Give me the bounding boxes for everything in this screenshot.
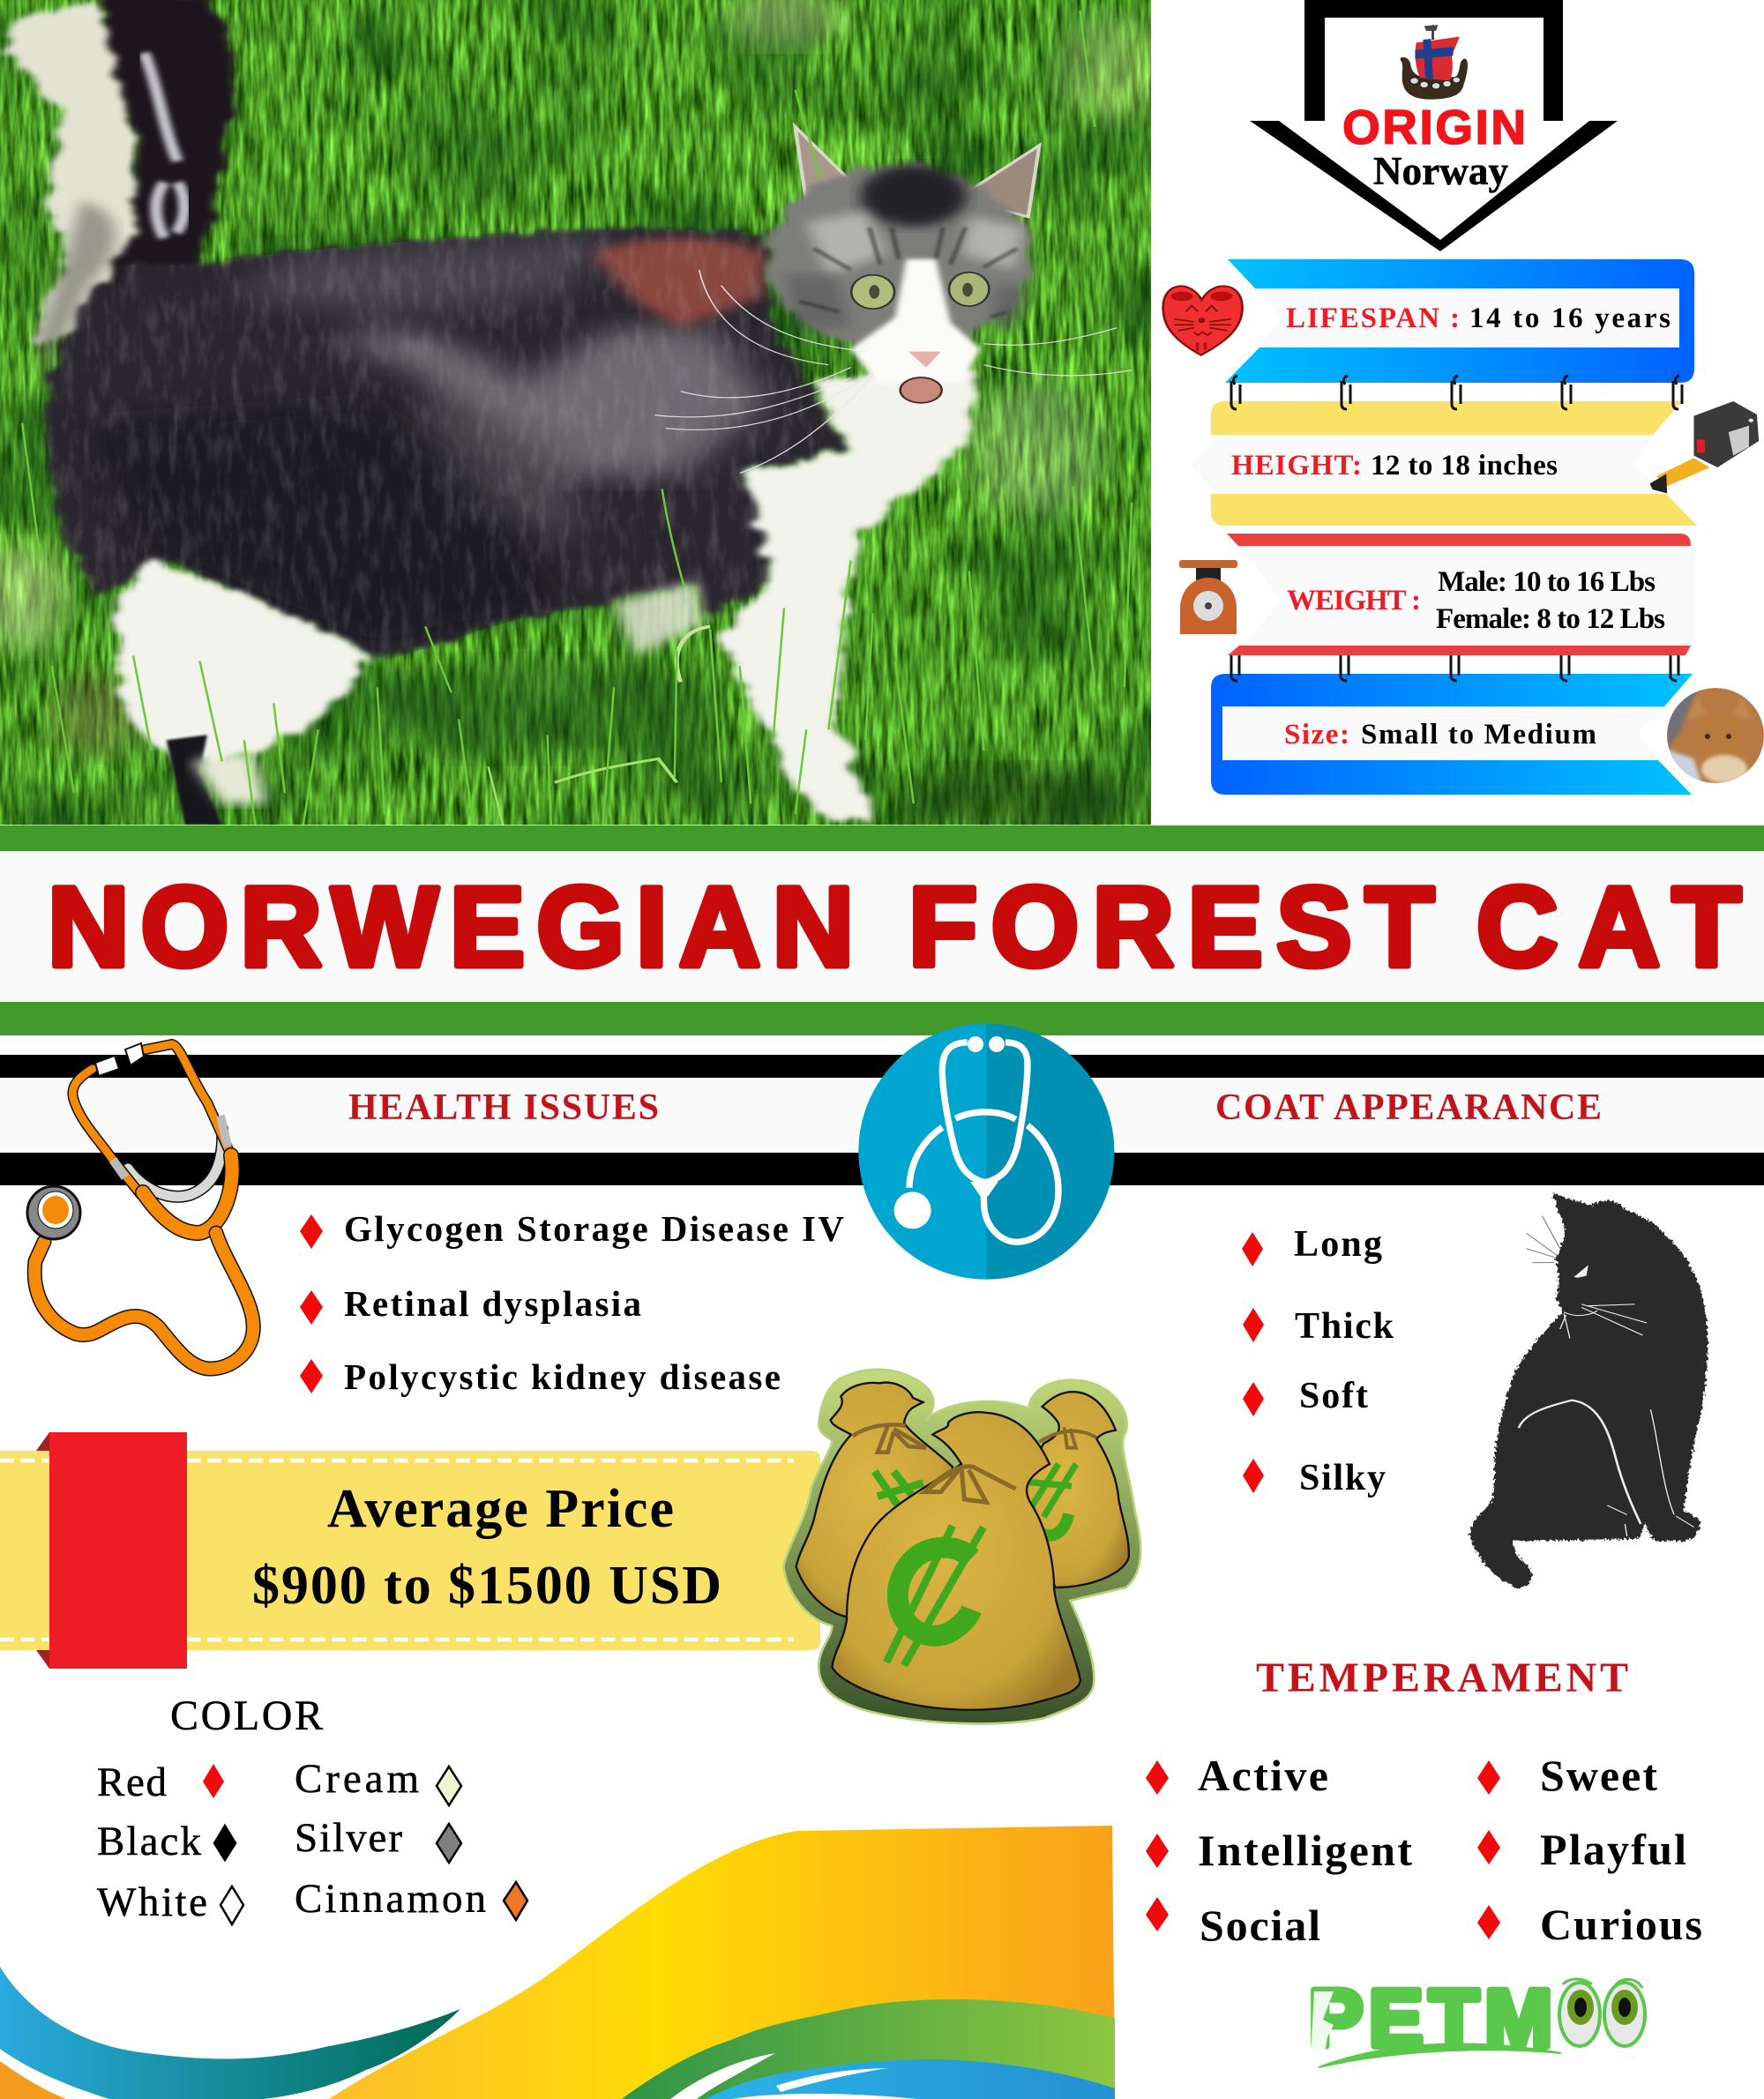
icon: black cat silhouette (1470, 1193, 1708, 1588)
temperament items (1198, 1751, 1702, 1950)
body fur (39, 222, 850, 661)
icon: scale (1179, 560, 1237, 634)
head (767, 127, 1039, 403)
tail (0, 0, 236, 381)
height text: 12 to 18 inches (1371, 450, 1558, 482)
color names (97, 1756, 486, 1925)
banner: size (1211, 674, 1764, 795)
list: health issues (300, 1208, 844, 1397)
temperament (1146, 1655, 1702, 1950)
size text: Small to Medium (1361, 719, 1596, 751)
color swatches (203, 1764, 527, 1924)
photo: orange cat (1667, 688, 1764, 785)
price text: Average Price (327, 1479, 674, 1539)
coat items: Soft (1299, 1376, 1368, 1416)
weight text: Male: 10 to 16 Lbs (1438, 566, 1656, 598)
icon: viking ship (1401, 25, 1468, 100)
size text: Size: (1284, 719, 1349, 751)
origin arrow (1250, 0, 1618, 251)
color names: Black (97, 1819, 201, 1864)
title: NORWEGIAN (48, 864, 854, 990)
red tag (49, 1432, 187, 1669)
health issue items (344, 1208, 844, 1397)
health issue items: Polycystic kidney disease (344, 1356, 781, 1397)
coat items: Long (1294, 1224, 1382, 1265)
heading: health issues: HEALTH ISSUES (348, 1087, 659, 1128)
logo: PETMOO: PETM (1309, 1974, 1552, 2064)
coat items (1294, 1224, 1394, 1498)
grass blades (22, 11, 1132, 825)
whiskers (654, 270, 1132, 474)
binder rings (1231, 376, 1682, 409)
health issue items: Retinal dysplasia (344, 1283, 641, 1324)
heading: coat appearance: COAT APPEARANCE (1215, 1087, 1602, 1128)
temperament items: Sweet (1540, 1751, 1657, 1800)
weight text (1287, 566, 1665, 635)
height text: HEIGHT: (1231, 450, 1362, 482)
white fur: chest, legs (111, 370, 976, 825)
height text (1231, 450, 1558, 482)
banner: height (1190, 401, 1759, 526)
front bag (832, 1412, 1080, 1710)
tabby stripes (799, 228, 1017, 317)
color names: Cinnamon (295, 1876, 486, 1922)
temperament items: Playful (1540, 1825, 1686, 1874)
list: coat appearance (1242, 1224, 1394, 1498)
temperament items: Social (1200, 1901, 1320, 1950)
title (48, 864, 1741, 990)
weight text: WEIGHT : (1287, 585, 1421, 616)
temperament items: Active (1198, 1751, 1328, 1800)
banner: weight (1179, 534, 1695, 655)
temperament items: Intelligent (1198, 1826, 1412, 1875)
color names: Cream (295, 1756, 419, 1802)
sunlit and shaded grass patches (0, 0, 1162, 830)
price text: $900 to $1500 USD (252, 1556, 721, 1616)
title: FOREST (908, 864, 1434, 990)
temperament items: Curious (1540, 1900, 1702, 1949)
color names: Silver (295, 1815, 402, 1861)
health issue items: Glycogen Storage Disease IV (344, 1208, 844, 1249)
icon: orange stethoscope (27, 1043, 253, 1369)
color list (97, 1692, 527, 1925)
lifespan text: 14 to 16 years (1469, 303, 1671, 334)
back bags (796, 1383, 1129, 1617)
icon: cat heart (1163, 286, 1243, 355)
title: CAT (1476, 864, 1741, 990)
decorative swoosh (0, 1826, 1115, 2099)
icon: blue stethoscope badge (858, 1024, 1114, 1280)
lifespan text: LIFESPAN : (1286, 303, 1460, 334)
coat items: Thick (1295, 1306, 1394, 1347)
coat items: Silky (1299, 1458, 1386, 1498)
section header band (0, 1055, 1764, 1185)
heading: color: COLOR (170, 1692, 323, 1739)
banner: lifespan (1163, 259, 1694, 383)
weight text: Female: 8 to 12 Lbs (1436, 603, 1665, 635)
temperament bullets (1146, 1760, 1500, 1939)
heading: temperament: TEMPERAMENT (1256, 1655, 1628, 1701)
icon: money bags (783, 1370, 1140, 1723)
color names: White (97, 1879, 207, 1925)
origin value: Norway (1373, 149, 1508, 193)
title band (0, 825, 1764, 1035)
price ribbon (0, 1432, 820, 1669)
binder rings (1231, 655, 1678, 681)
price text (252, 1479, 721, 1616)
lifespan text (1286, 303, 1671, 334)
logo: PETMOO (1309, 1974, 1645, 2067)
icon: tape measure (1649, 401, 1759, 493)
eyes (851, 273, 989, 309)
cat highlights and whiskers (1519, 1216, 1693, 1536)
cedi sign (886, 1526, 983, 1665)
photo: Norwegian forest cat in grass (0, 0, 1162, 830)
logo eyes (1559, 1979, 1645, 2046)
origin label: ORIGIN (1342, 100, 1526, 154)
color names: Red (97, 1759, 167, 1805)
